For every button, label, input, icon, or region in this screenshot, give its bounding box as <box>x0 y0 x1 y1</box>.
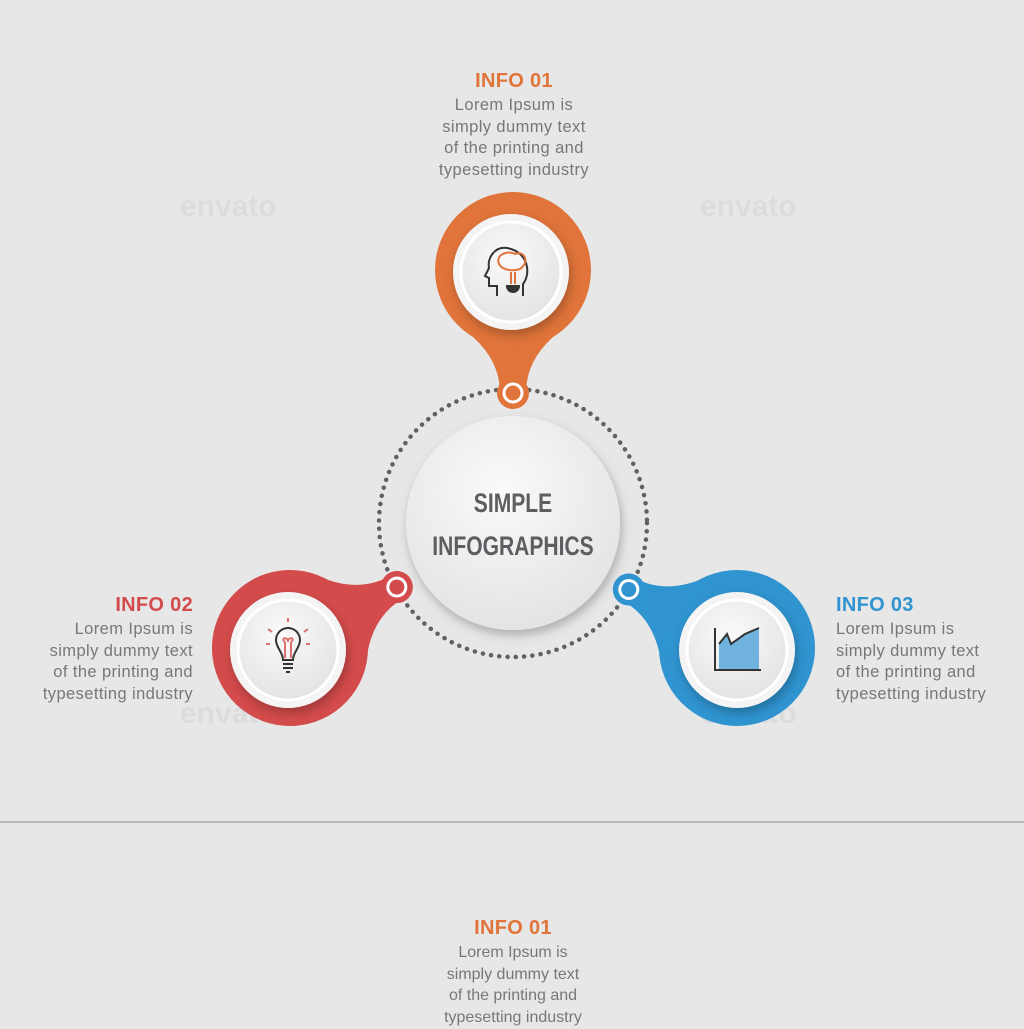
text: info 03: Lorem Ipsum is <box>836 620 954 638</box>
text: info 02: simply dummy text <box>50 642 193 660</box>
text: info 03 <box>836 594 986 703</box>
text: info 02 <box>43 594 193 703</box>
text: info 03: typesetting industry <box>836 685 986 703</box>
center circle: INFOGRAPHICS <box>432 532 594 562</box>
text: info 01 bottom: INFO 01 <box>474 917 552 939</box>
watermarks: envato <box>700 697 797 730</box>
pin: info 01 orange <box>435 192 591 409</box>
watermarks: envato <box>180 697 277 730</box>
text: info 01 bottom: simply dummy text <box>447 966 579 983</box>
text: info 01 bottom: of the printing and <box>449 987 577 1004</box>
text: info 01 top: typesetting industry <box>439 161 589 179</box>
icon: light bulb <box>266 618 310 672</box>
text: info 01 bottom <box>444 917 582 1026</box>
watermarks: envato <box>180 190 277 223</box>
dotted ring <box>379 389 647 657</box>
pin: info 02 red <box>184 511 449 754</box>
text: info 01 top: of the printing and <box>444 139 584 157</box>
center circle <box>406 416 620 630</box>
text: info 01 bottom: Lorem Ipsum is <box>458 944 568 961</box>
text: info 02: typesetting industry <box>43 685 193 703</box>
text: info 01 top: simply dummy text <box>442 118 586 136</box>
icon: chart <box>715 628 761 670</box>
text: info 03: of the printing and <box>836 663 976 681</box>
pin: info 03 blue <box>578 513 843 754</box>
text: info 01 bottom: typesetting industry <box>444 1009 582 1026</box>
watermarks: envato <box>700 190 797 223</box>
center circle: SIMPLE <box>474 489 552 519</box>
icon: brain head <box>485 248 527 296</box>
text: info 02: INFO 02 <box>115 594 193 616</box>
divider <box>0 821 1024 823</box>
text: info 03: INFO 03 <box>836 594 914 616</box>
text: info 01 top: INFO 01 <box>475 70 553 92</box>
text: info 02: Lorem Ipsum is <box>75 620 193 638</box>
text: info 01 top <box>439 70 589 179</box>
text: info 01 top: Lorem Ipsum is <box>455 96 573 114</box>
watermarks <box>180 190 797 730</box>
text: info 02: of the printing and <box>53 663 193 681</box>
text: info 03: simply dummy text <box>836 642 979 660</box>
